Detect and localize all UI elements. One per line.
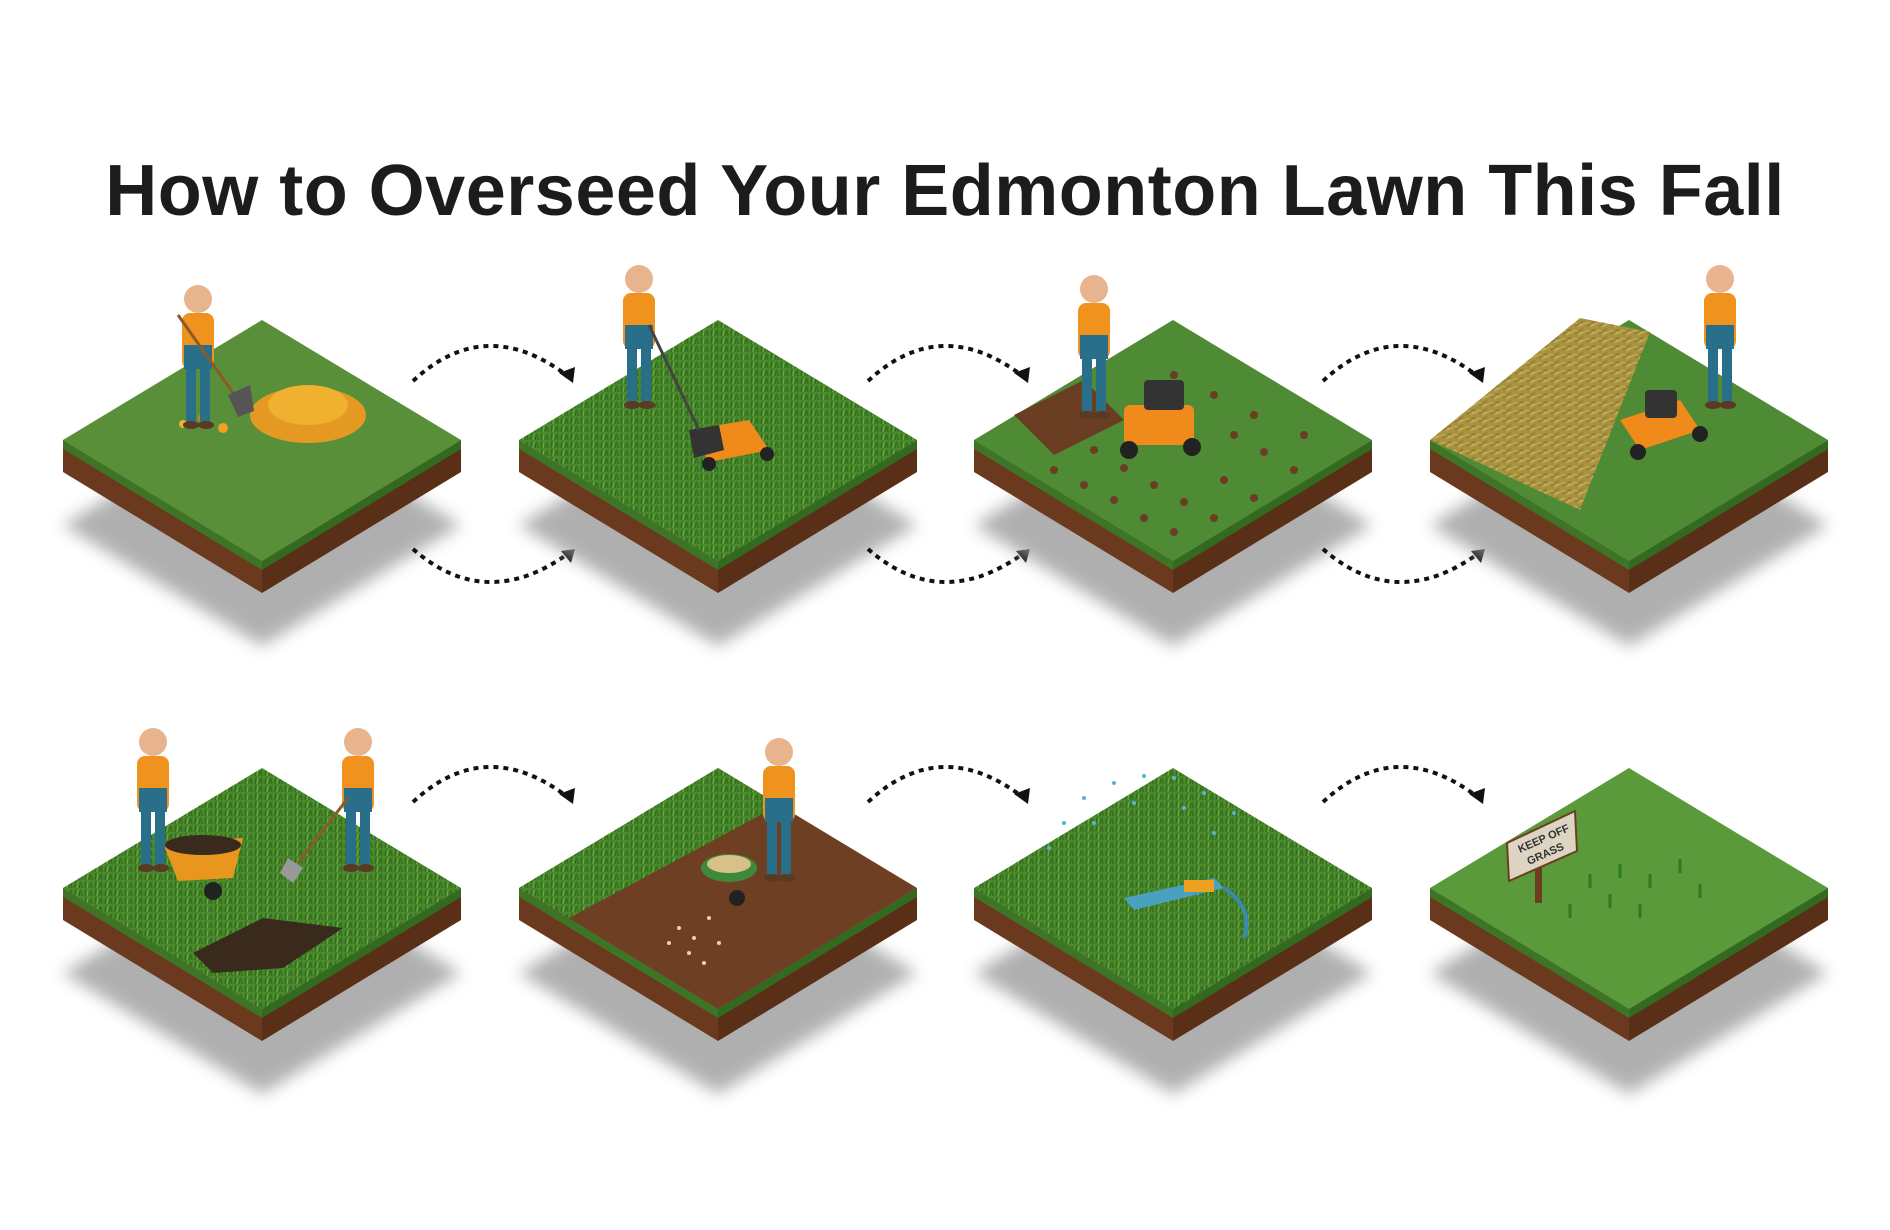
tile 6: seed bbox=[519, 738, 917, 1094]
arrow 3-4 bbox=[1323, 346, 1485, 582]
arrow 1-2 bbox=[413, 346, 575, 582]
sign bbox=[1507, 811, 1577, 903]
arrow 6-7 bbox=[868, 767, 1030, 804]
tile 2: mow bbox=[519, 265, 917, 646]
title: How to Overseed Your Edmonton Lawn This Fall bbox=[105, 151, 1785, 231]
tile 4: dethatch bbox=[1430, 265, 1828, 646]
workers bbox=[137, 728, 169, 872]
spreader bbox=[701, 854, 757, 906]
seeds bbox=[667, 916, 721, 965]
water spray bbox=[1047, 774, 1236, 850]
sign: GRASS bbox=[1525, 841, 1566, 868]
worker bbox=[623, 265, 699, 430]
worker bbox=[1704, 265, 1736, 409]
tile 3: aerate bbox=[974, 275, 1372, 646]
wheelbarrow bbox=[163, 835, 243, 900]
aerator bbox=[1120, 380, 1201, 459]
arrow 5-6 bbox=[413, 767, 575, 804]
tile 7: water bbox=[974, 768, 1372, 1094]
arrow 2-3 bbox=[868, 346, 1030, 582]
leaf pile bbox=[250, 387, 366, 443]
plugs bbox=[1050, 371, 1308, 536]
tile 1: rake leaves bbox=[63, 285, 461, 646]
dethatcher bbox=[1620, 390, 1708, 460]
worker with rake bbox=[178, 285, 254, 429]
sprinkler bbox=[1124, 878, 1246, 938]
sprouts bbox=[1570, 859, 1700, 918]
arrow 7-8 bbox=[1323, 767, 1485, 804]
worker bbox=[763, 738, 795, 882]
sign: KEEP OFF bbox=[1516, 822, 1572, 856]
tile 8: keep off bbox=[1430, 768, 1828, 1094]
mower bbox=[689, 420, 774, 471]
tile 5: topdress bbox=[63, 728, 461, 1094]
worker bbox=[1078, 275, 1110, 419]
